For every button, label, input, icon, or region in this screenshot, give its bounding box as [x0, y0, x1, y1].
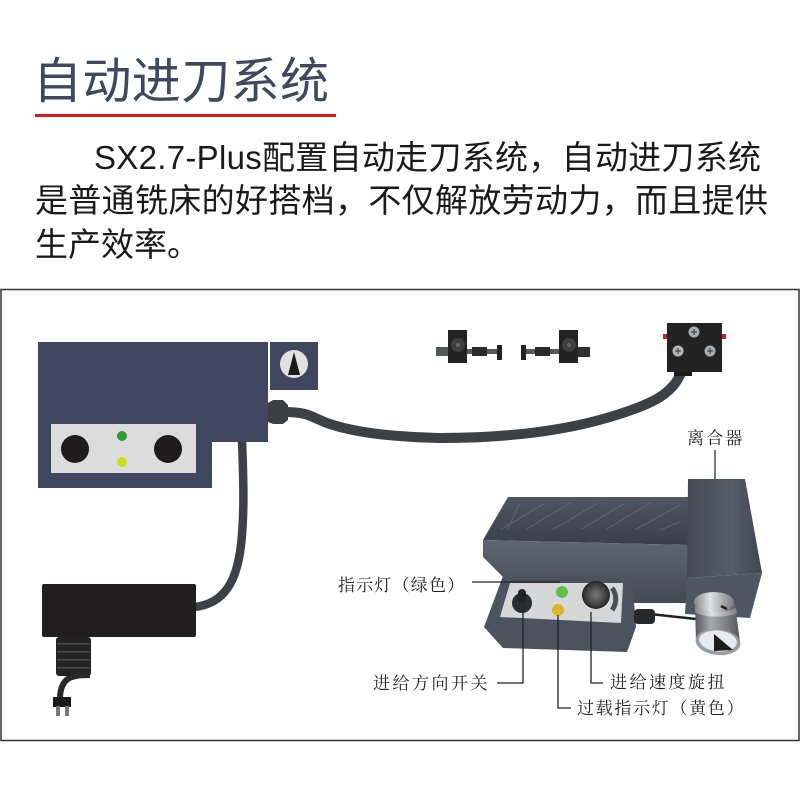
intro text: 是普通铣床的好搭档，不仅解放劳动力，而且提供 [35, 182, 768, 219]
leader: overload lamp [558, 615, 571, 708]
cable: controller to actuator [285, 373, 681, 438]
direction switch [512, 593, 532, 613]
yellow lamp [552, 604, 564, 616]
intro text: 生产效率。 [35, 226, 200, 263]
intro text [35, 139, 768, 263]
cable: controller to power box [194, 440, 243, 607]
label: overload lamp: 过载指示灯（黄色） [577, 699, 745, 718]
speed dial [612, 588, 616, 610]
power box [42, 584, 196, 637]
cable gland [268, 400, 288, 424]
diagram panel frame [1, 290, 799, 740]
leader: green lamp [472, 581, 560, 583]
control panel plate [500, 583, 623, 623]
front face [483, 540, 688, 603]
yellow led [117, 457, 127, 467]
intro text: SX2.7-Plus配置自动走刀系统，自动进刀系统 [94, 139, 761, 176]
leader: direction switch [497, 613, 523, 683]
direction indicator box [270, 342, 318, 390]
label: speed knob: 进给速度旋扭 [610, 673, 727, 692]
clutch knob [694, 592, 742, 657]
clutch leader [714, 450, 716, 490]
hatching [500, 503, 680, 530]
buttons [61, 435, 89, 463]
controller box [38, 342, 268, 488]
clutch label: 离合器 [687, 429, 745, 448]
top face [483, 497, 688, 545]
limit stop left [436, 330, 502, 363]
cable gland and link [634, 609, 696, 624]
green led [117, 431, 127, 441]
limit stop right [521, 330, 590, 363]
title: 自动进刀系统 [33, 55, 329, 109]
label: direction switch: 进给方向开关 [373, 674, 490, 693]
clutch housing [685, 479, 762, 618]
label: green lamp: 指示灯（绿色） [338, 576, 465, 595]
title underline [35, 114, 336, 117]
control box [484, 576, 636, 652]
leader: speed knob [591, 612, 603, 683]
power cord coil and plug [53, 637, 91, 716]
green lamp [556, 586, 568, 598]
feed unit body [483, 497, 688, 603]
controller panel [51, 424, 196, 473]
actuator block [663, 323, 726, 376]
